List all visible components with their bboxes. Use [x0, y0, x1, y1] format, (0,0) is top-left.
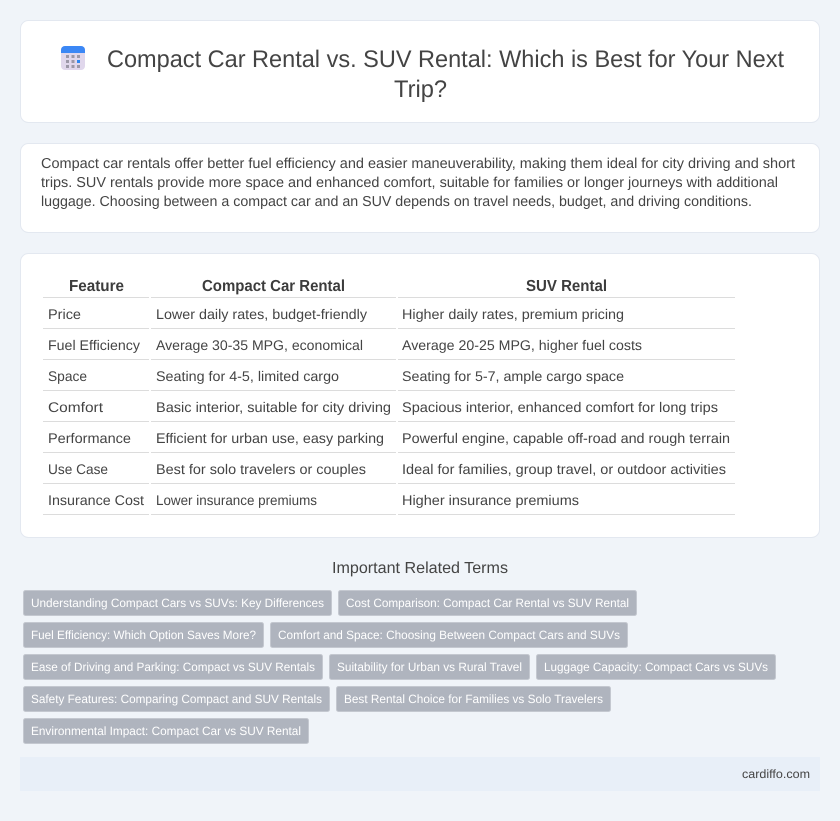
text block: summary: trips. SUV rentals provide more space and enhanced comfort, suitable for families or longer journeys with additional	[41, 175, 778, 191]
panel: header	[20, 20, 820, 122]
row: performance: Performance	[48, 430, 131, 446]
row: price: Lower daily rates, budget-friendly	[156, 306, 367, 322]
tag	[24, 686, 330, 712]
row: insurance cost: Insurance Cost	[48, 492, 144, 508]
row: price	[48, 306, 624, 322]
row: use case: Best for solo travelers or couples	[156, 461, 366, 477]
footer	[20, 757, 820, 791]
title	[107, 46, 784, 103]
tag	[24, 654, 322, 680]
tag: Cost Comparison: Compact Car Rental vs SUV Rental	[346, 596, 629, 610]
row: fuel efficiency: Average 30-35 MPG, economical	[156, 337, 363, 353]
tag: Best Rental Choice for Families vs Solo Travelers	[344, 692, 603, 706]
row: use case	[48, 461, 726, 477]
tag: Environmental Impact: Compact Car vs SUV Rental	[31, 724, 301, 738]
heading: related terms: Important Related Terms	[332, 560, 508, 577]
row: fuel efficiency: Fuel Efficiency	[48, 337, 140, 353]
tag	[536, 654, 776, 680]
text block: summary: Compact car rentals offer better fuel efficiency and easier maneuverability, making them ideal for city driving and short	[41, 156, 795, 172]
related term tags	[24, 590, 776, 744]
row: insurance cost	[48, 492, 579, 508]
footer: cardiffo.com	[742, 767, 810, 781]
title: Trip?	[394, 76, 447, 103]
tag	[336, 686, 610, 712]
row: comfort: Basic interior, suitable for city driving	[156, 399, 391, 415]
row: insurance cost: Lower insurance premiums	[156, 492, 317, 508]
tag	[24, 718, 308, 744]
text block: summary	[41, 156, 795, 210]
tag	[24, 590, 332, 616]
row: use case: Use Case	[48, 461, 108, 477]
table header: Feature	[69, 278, 124, 295]
table header: Compact Car Rental	[202, 278, 345, 295]
tag: Luggage Capacity: Compact Cars vs SUVs	[544, 660, 768, 674]
row: performance: Powerful engine, capable off-road and rough terrain	[402, 430, 730, 446]
row: fuel efficiency: Average 20-25 MPG, higher fuel costs	[402, 337, 642, 353]
table header: SUV Rental	[526, 278, 607, 295]
row: fuel efficiency	[48, 337, 642, 353]
tag	[270, 622, 628, 648]
row: comfort: Spacious interior, enhanced comfort for long trips	[402, 399, 718, 415]
text block: summary: luggage. Choosing between a compact car and an SUV depends on travel needs, budget, and driving conditions.	[41, 194, 752, 210]
row: price: Higher daily rates, premium pricing	[402, 306, 624, 322]
tag: Comfort and Space: Choosing Between Compact Cars and SUVs	[278, 628, 620, 642]
tag: Suitability for Urban vs Rural Travel	[337, 660, 522, 674]
row: space: Seating for 4-5, limited cargo	[156, 368, 339, 384]
row: comfort	[48, 399, 718, 415]
table header	[69, 278, 607, 295]
tag: Understanding Compact Cars vs SUVs: Key Differences	[31, 596, 324, 610]
row: performance: Efficient for urban use, easy parking	[156, 430, 384, 446]
row: space: Seating for 5-7, ample cargo space	[402, 368, 624, 384]
title: Compact Car Rental vs. SUV Rental: Which is Best for Your Next	[107, 46, 784, 73]
tag	[330, 654, 530, 680]
tag: Fuel Efficiency: Which Option Saves More?	[31, 628, 256, 642]
tag	[338, 590, 636, 616]
tag	[24, 622, 264, 648]
tag: Ease of Driving and Parking: Compact vs SUV Rentals	[31, 660, 315, 674]
panel: summary	[20, 144, 820, 232]
row: price: Price	[48, 306, 81, 322]
panel: comparison table	[20, 254, 820, 538]
row: performance	[48, 430, 730, 446]
row: comfort: Comfort	[48, 399, 103, 415]
row: space: Space	[48, 368, 87, 384]
row: use case: Ideal for families, group travel, or outdoor activities	[402, 461, 726, 477]
tag: Safety Features: Comparing Compact and SUV Rentals	[31, 692, 322, 706]
row: insurance cost: Higher insurance premiums	[402, 492, 579, 508]
row: space	[48, 368, 624, 384]
icon: calendar	[61, 46, 85, 70]
